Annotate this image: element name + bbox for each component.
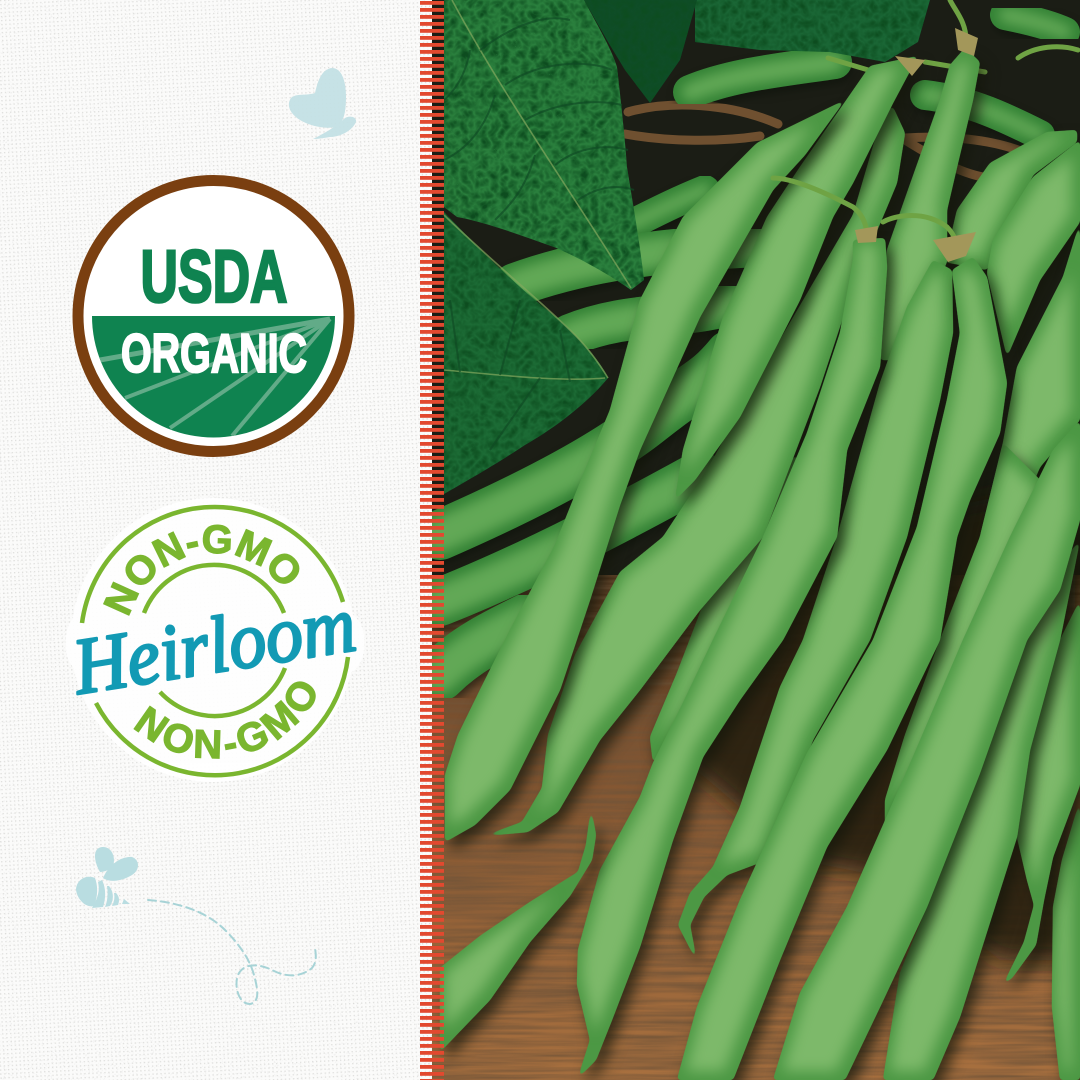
leaf side veins (444, 18, 634, 450)
bean: centre slender (484, 105, 905, 836)
bean: upper right edge (987, 140, 1080, 357)
heading: ORGANIC: ORGANIC (121, 322, 307, 384)
bean: right behind (980, 222, 1080, 537)
bean: centre long with stem (577, 178, 887, 1078)
bean leaves (444, 0, 930, 494)
badge: Non-GMO Heirloom seal (66, 498, 364, 782)
photo: green beans on a wooden table (432, 0, 1080, 1080)
text: Heirloom script: Heirloom (66, 580, 362, 712)
icon: bee with dashed flight trail (76, 847, 316, 1004)
heading: USDA: USDA (140, 235, 288, 318)
bean: small lower left (440, 808, 596, 1052)
leaf veins (444, 0, 631, 379)
badge: USDA Organic seal (78, 180, 349, 452)
leaf: top right (695, 0, 930, 62)
red stitched edge (420, 0, 444, 1080)
leaf: top centre (584, 0, 697, 103)
bean: front right (773, 420, 1080, 1080)
bean: upper right short (945, 130, 1077, 270)
dark foliage backdrop (432, 0, 1080, 575)
bean: top centre (675, 56, 918, 500)
bean: left long (445, 100, 845, 842)
calyx caps (855, 28, 978, 262)
text: NON-GMO top: NON-GMO (103, 524, 300, 616)
text: NON-GMO bottom: NON-GMO (133, 681, 316, 759)
bean: middle long behind (678, 260, 953, 962)
leaf: upper left (444, 0, 644, 290)
bee (76, 847, 138, 908)
bean: top centre right (880, 0, 1078, 360)
background beans (440, 15, 1065, 675)
green field half (90, 316, 340, 441)
bean: lower right (883, 540, 1080, 1080)
ring arcs (82, 507, 348, 775)
white halo (66, 498, 364, 782)
leaf: lower left (444, 212, 608, 494)
wooden table (432, 575, 1080, 1080)
bean: rear diagonal (650, 455, 810, 763)
woven basket rim (625, 105, 1018, 178)
icon: butterfly (289, 68, 356, 139)
bean: far right lower (1052, 800, 1080, 1080)
bean: front with stem (677, 216, 1007, 1080)
bean: right edge with tail (1003, 600, 1080, 985)
background: white woven fabric panel (0, 0, 432, 1080)
dashed trail (148, 900, 316, 1004)
bean: right long (885, 443, 1050, 830)
table shadow under the beans (650, 575, 1080, 977)
